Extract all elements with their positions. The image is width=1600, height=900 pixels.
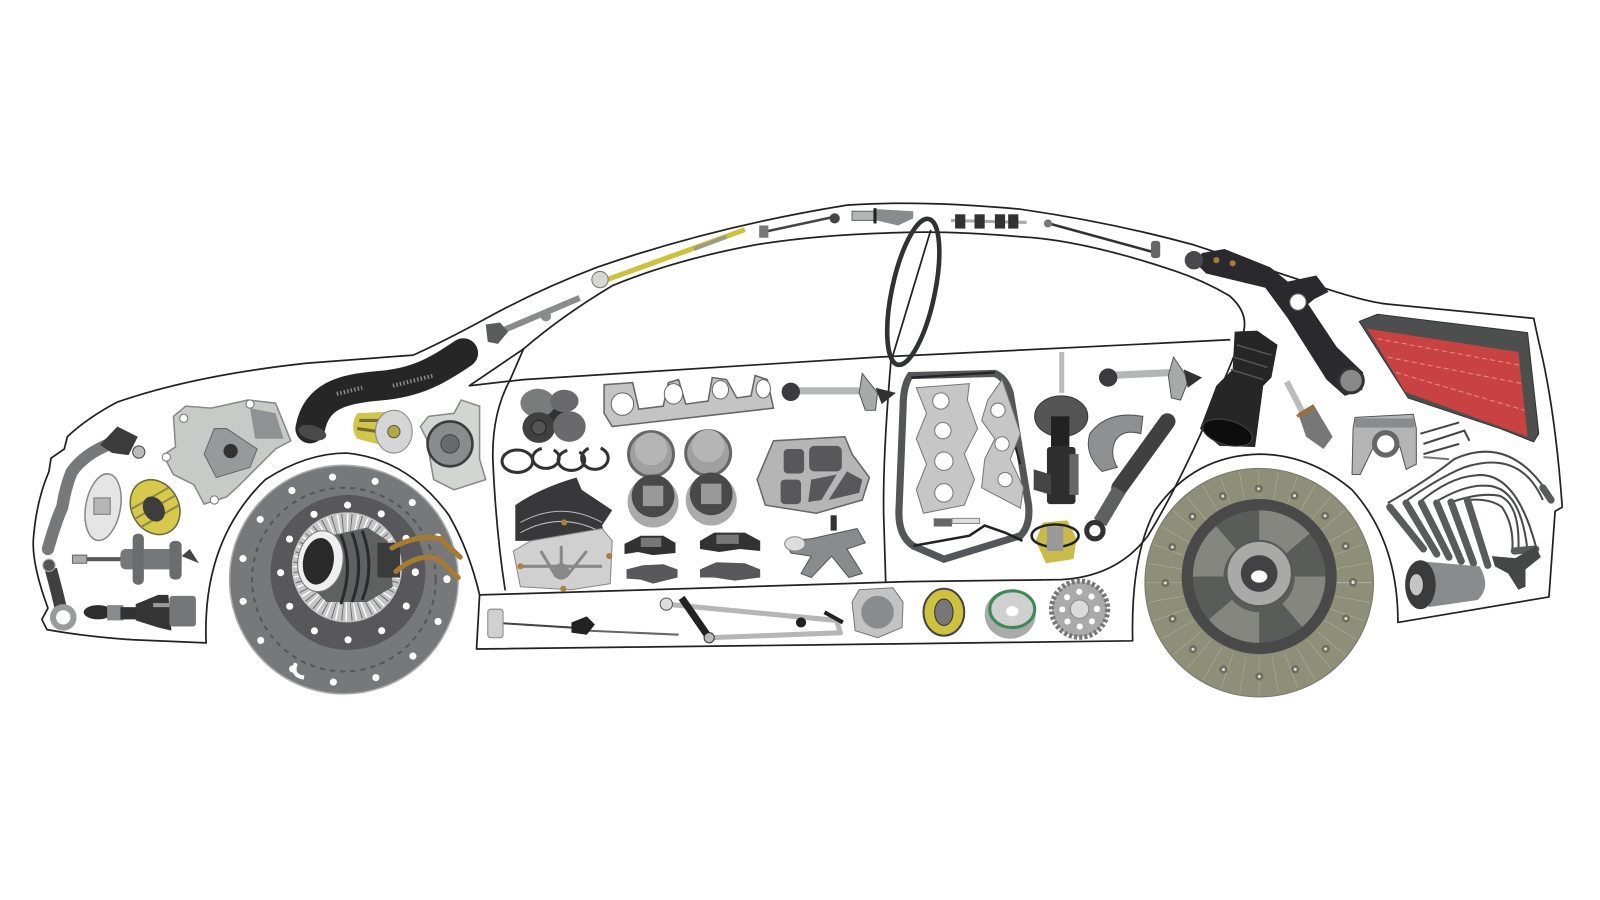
icon: sway bar link xyxy=(1044,219,1160,258)
icon: water pump housing xyxy=(162,400,291,504)
icon: timing gear xyxy=(1052,582,1107,637)
icon: spark plug xyxy=(1287,382,1333,449)
icon: air filter xyxy=(1359,314,1539,442)
icon: pistons set xyxy=(628,430,737,528)
icon: fan clutch xyxy=(513,478,612,592)
icon: engine mount bracket xyxy=(782,373,896,410)
car outline xyxy=(33,203,1562,649)
icon: clutch master cylinder xyxy=(72,534,199,585)
panel: front section parts xyxy=(43,353,486,694)
icon: shock absorber xyxy=(1087,421,1167,539)
icon: yellow pulley xyxy=(120,471,190,544)
icon: stabilizer link xyxy=(759,213,840,238)
icon: yellow tensioner bearing xyxy=(923,589,964,636)
icon: small spark plug xyxy=(934,518,980,527)
icon: upper mount bracket xyxy=(1099,357,1202,400)
panel: roofline parts xyxy=(486,208,1160,369)
icon: strut assembly xyxy=(1034,352,1088,504)
icon: thermostat xyxy=(1032,520,1079,563)
panel: front door parts xyxy=(502,373,896,592)
icon: yellow oil filter xyxy=(353,410,412,453)
icon: ignition wires xyxy=(1388,452,1551,565)
icon: exhaust manifold gasket xyxy=(604,376,773,427)
icon: lower control arm xyxy=(1185,249,1363,396)
icon: universal joint assembly xyxy=(84,595,196,631)
icon: hub bearing xyxy=(852,588,903,638)
icon: black radiator hose xyxy=(297,353,463,443)
icon: wiper linkage xyxy=(660,598,843,643)
icon: water pump xyxy=(420,400,486,490)
icon: hardware kit xyxy=(1420,422,1469,459)
icon: circlips xyxy=(502,447,608,472)
panel: rear door parts xyxy=(899,352,1202,563)
icon: tie rod end xyxy=(48,427,145,549)
icon: yellow steering rod xyxy=(592,230,745,288)
icon: drive belt loop xyxy=(877,215,950,369)
icon: rear wheel clutch disc xyxy=(1145,468,1373,697)
icon: throttle cable xyxy=(488,609,679,638)
icon: pitman arm xyxy=(43,559,73,628)
icon: rubber boot xyxy=(1200,331,1278,451)
icon: green idler pulley xyxy=(985,590,1036,639)
icon: intake manifold gasket xyxy=(916,380,1023,513)
icon: sensor xyxy=(1492,546,1541,590)
icon: fuel injector xyxy=(852,208,913,226)
icon: piston xyxy=(1352,414,1416,474)
icon: valve body plate xyxy=(757,437,869,513)
icon: universal joint cross xyxy=(520,389,586,443)
panel: rear section parts xyxy=(1145,249,1551,697)
panel: sill parts xyxy=(488,582,1107,643)
icon: tie rod with flange xyxy=(486,298,580,344)
icon: front wheel clutch pressure plate xyxy=(230,465,460,694)
icon: oil pan gasket xyxy=(899,372,1029,559)
icon: lamp lens xyxy=(80,471,126,543)
icon: connector link xyxy=(951,214,1027,229)
icon: brake pads xyxy=(624,533,760,584)
icon: rectifier xyxy=(1088,415,1143,471)
icon: steering knuckle xyxy=(785,515,865,578)
icon: suspension bushing xyxy=(1405,560,1485,609)
